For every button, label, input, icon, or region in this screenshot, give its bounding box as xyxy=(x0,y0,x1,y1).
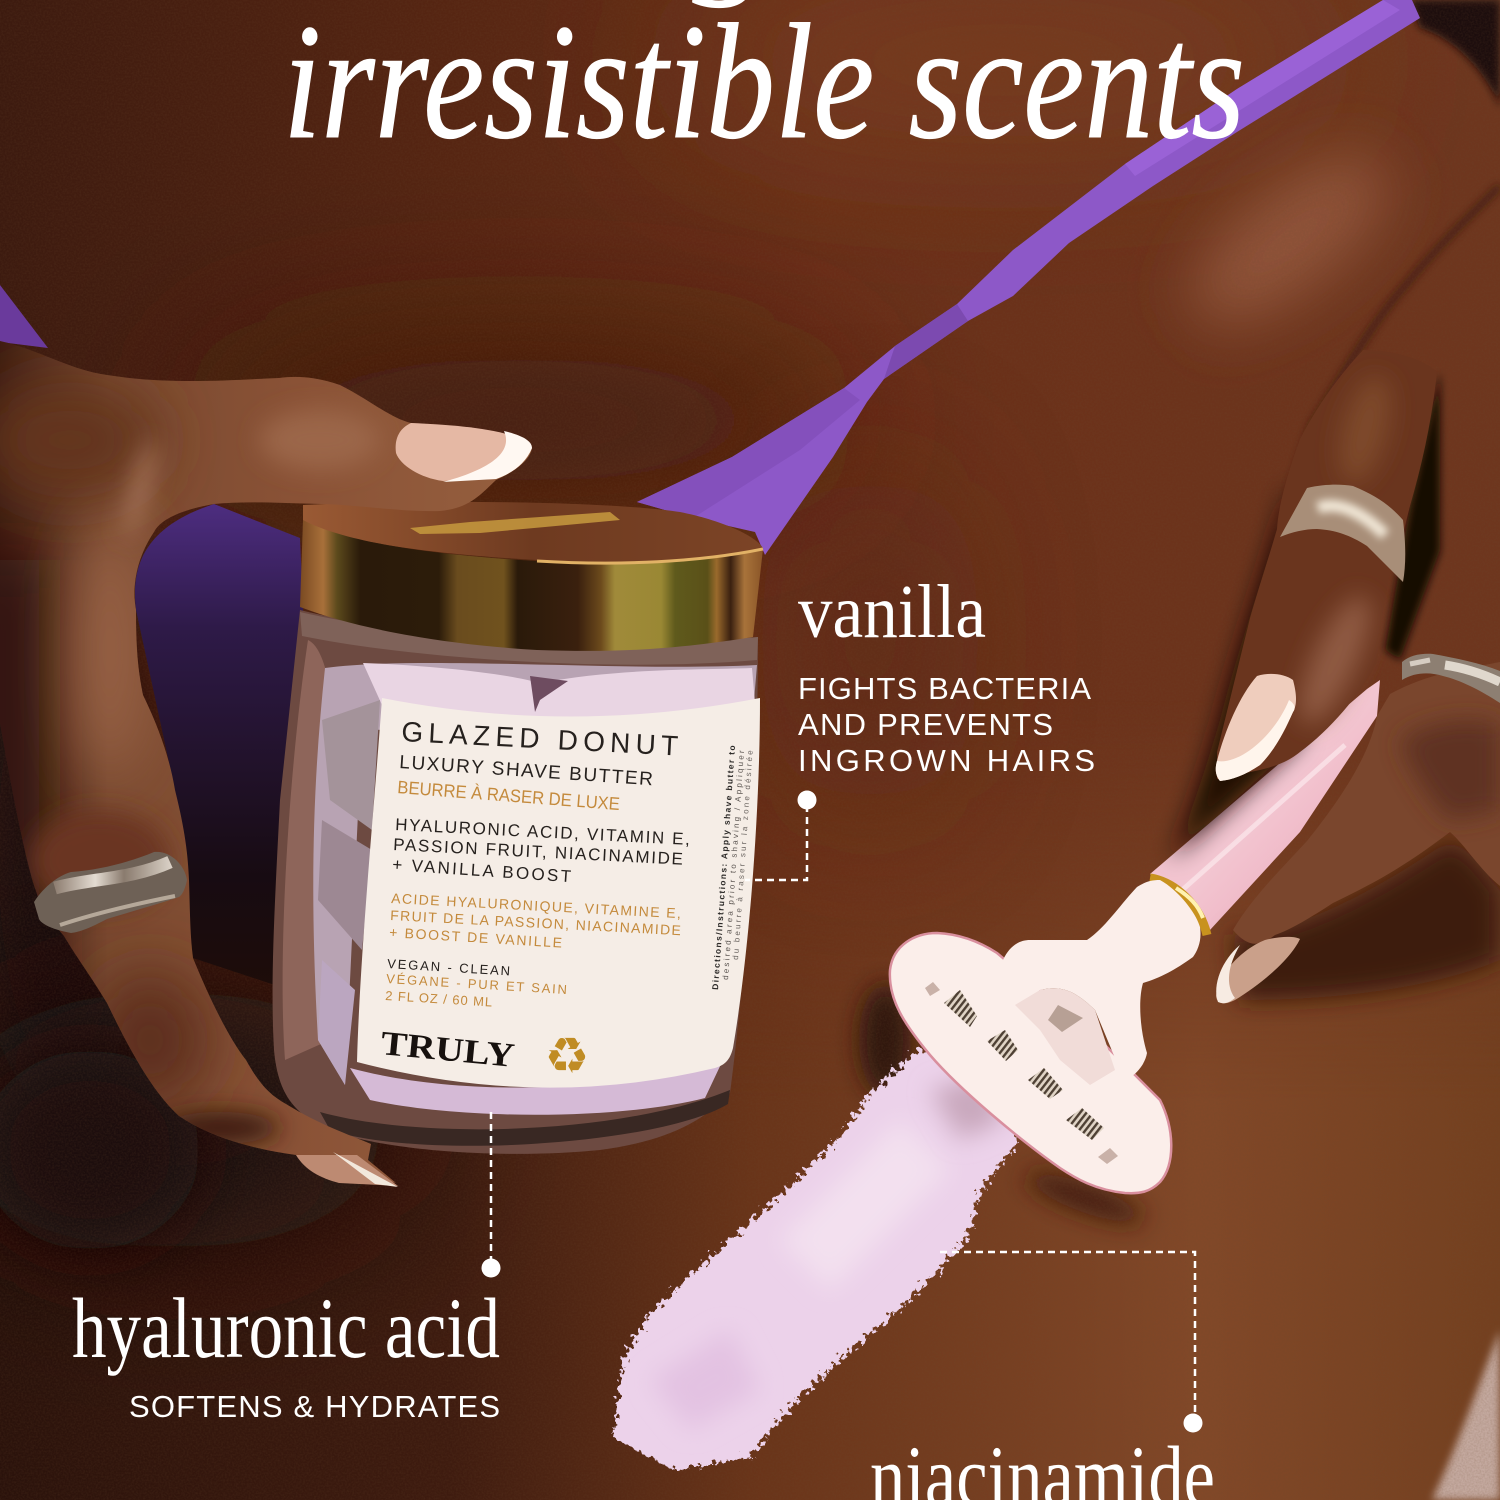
cream inside jar xyxy=(313,663,757,1085)
left hand holding the jar xyxy=(0,330,540,1200)
callout: vanilla xyxy=(745,570,1095,880)
cream swatch xyxy=(613,1047,1018,1470)
finger shadow xyxy=(1170,480,1300,860)
nail upper xyxy=(1216,674,1296,781)
label text: du beurre à raser sur la zone désirée xyxy=(731,749,755,960)
jar lid xyxy=(300,502,763,651)
thumb nail xyxy=(396,423,532,481)
label text: PASSION FRUIT, NIACINAMIDE xyxy=(393,835,683,869)
lower nail xyxy=(296,1155,398,1186)
head xyxy=(890,933,1171,1193)
label text: VEGAN - CLEAN xyxy=(387,956,511,979)
callout: vanilla: INGROWN HAIRS xyxy=(798,743,1095,778)
label text: Directions/Instructions: Apply shave butter to xyxy=(710,745,737,990)
callout: hyaluronic acid xyxy=(72,1112,500,1424)
handle xyxy=(1150,680,1380,930)
ring 1 xyxy=(1280,485,1405,582)
razor neck xyxy=(1002,880,1201,1077)
label text: VÉGANE - PUR ET SAIN xyxy=(386,971,567,997)
dark crease xyxy=(1385,372,1440,660)
label text: + BOOST DE VANILLE xyxy=(389,924,562,951)
razor xyxy=(890,680,1380,1193)
ring xyxy=(34,852,187,933)
blades xyxy=(944,990,1104,1140)
lower hand and ring finger xyxy=(1233,662,1500,944)
dark purple fabric behind the hand xyxy=(135,504,320,1000)
label text: TRULY xyxy=(379,1025,516,1075)
shadow beneath hand xyxy=(1233,840,1500,1000)
jar glass body xyxy=(273,610,758,1154)
label text: ACIDE HYALURONIQUE, VITAMINE E, xyxy=(391,890,681,921)
nail lower xyxy=(1216,937,1300,1003)
callout: vanilla: FIGHTS BACTERIA xyxy=(798,671,1091,706)
label text: 2 FL OZ / 60 ML xyxy=(385,988,493,1010)
callout: niacinamide xyxy=(870,1252,1215,1500)
callout: hyaluronic acid: hyaluronic acid xyxy=(72,1280,500,1376)
callout: hyaluronic acid: SOFTENS & HYDRATES xyxy=(129,1389,500,1424)
label text: HYALURONIC ACID, VITAMIN E, xyxy=(395,815,690,849)
label text: desired area prior to shaving / Appliquer xyxy=(721,750,746,980)
recycle icon: ♻ xyxy=(545,1027,589,1085)
label text: FRUIT DE LA PASSION, NIACINAMIDE xyxy=(390,907,681,938)
label text: GLAZED DONUT xyxy=(401,716,679,761)
right hand with fingers and rings xyxy=(1170,350,1500,1003)
purple bikini strap xyxy=(0,0,1420,555)
upper finger xyxy=(1217,350,1437,779)
jar xyxy=(273,502,763,1154)
callout: vanilla: AND PREVENTS xyxy=(798,707,1053,742)
label text: LUXURY SHAVE BUTTER xyxy=(399,752,654,790)
label text: BEURRE À RASER DE LUXE xyxy=(397,777,621,814)
ring 2 xyxy=(1402,654,1500,703)
product label xyxy=(357,698,760,1088)
label text: + VANILLA BOOST xyxy=(392,855,572,886)
label text xyxy=(379,716,755,1075)
callout: vanilla: vanilla xyxy=(798,570,986,654)
